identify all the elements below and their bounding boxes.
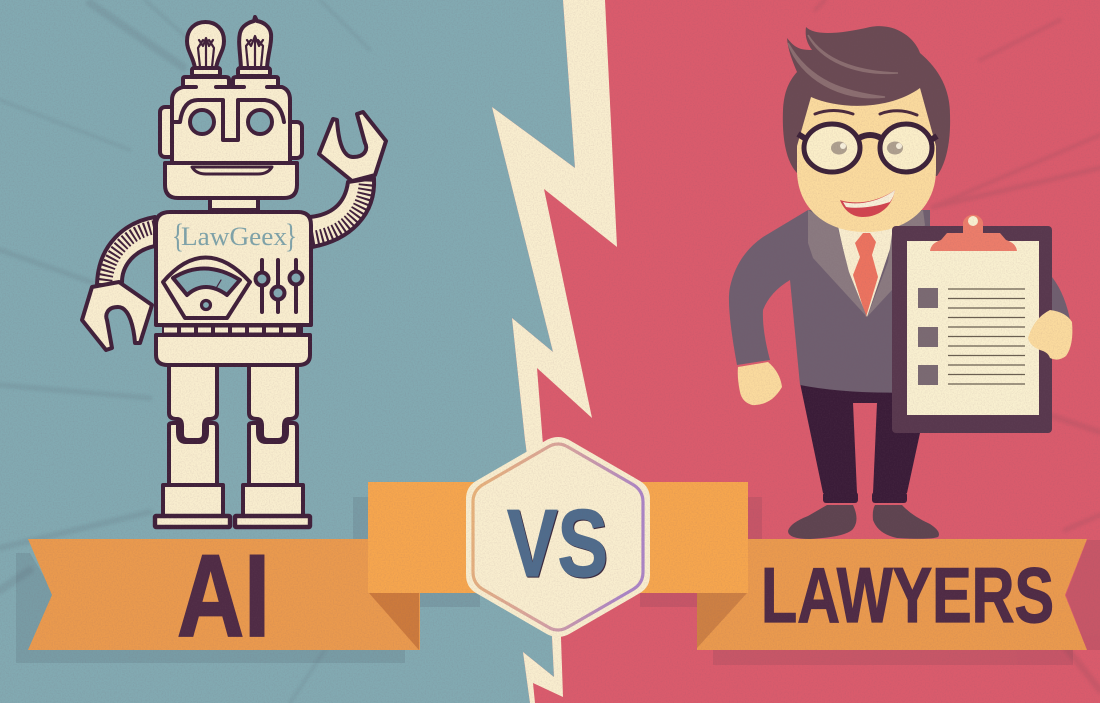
robot left arm	[97, 217, 155, 287]
ribbon: Lawyers	[697, 539, 1087, 650]
ribbon fold left	[369, 593, 419, 650]
ribbon drop shadows	[16, 497, 1100, 665]
left boot	[163, 485, 223, 516]
robot left leg	[155, 365, 230, 527]
checklist lines	[948, 289, 1025, 384]
robot neck	[210, 198, 258, 210]
lawyer trouser cuffs	[823, 492, 907, 503]
heading: AI: AI	[177, 530, 270, 661]
lawyer suit jacket	[729, 210, 930, 393]
lawyer pupils	[831, 142, 903, 154]
robot	[82, 17, 386, 527]
robot eyes	[190, 110, 272, 134]
VS text shadow: VS	[508, 491, 609, 598]
robot right bulb	[238, 17, 271, 76]
robot mouth	[192, 167, 272, 174]
gauge	[163, 258, 250, 318]
lawyer hair highlights	[788, 35, 898, 98]
robot left wrench	[82, 282, 152, 350]
ribbon fold right	[697, 593, 747, 648]
lawyer right hand	[1028, 310, 1072, 360]
robot right arm	[310, 178, 374, 247]
lawyer lapels	[808, 210, 925, 317]
lawyer face	[797, 88, 936, 232]
clipboard	[892, 215, 1052, 433]
lawyer tie	[853, 233, 878, 317]
lawyer	[729, 26, 1072, 539]
lawyer glasses	[798, 124, 937, 172]
brand text: LawGeex: }	[285, 218, 297, 255]
ribbon: AI	[28, 539, 420, 650]
lawyer eyebrows	[815, 110, 917, 115]
clipboard clip	[930, 215, 1017, 251]
central banner	[368, 482, 748, 593]
background: teal side	[0, 0, 575, 703]
robot jaw	[165, 163, 297, 198]
robot right wrench	[319, 112, 386, 181]
robot belt	[162, 325, 303, 335]
lawyer trousers	[800, 383, 925, 493]
brand text: LawGeex: LawGeex	[181, 222, 287, 251]
brand text: LawGeex	[172, 218, 297, 255]
lawyer hair back	[783, 26, 950, 176]
checklist boxes	[918, 288, 938, 385]
robot ears	[160, 107, 178, 157]
robot right leg	[235, 365, 310, 527]
hexagon ring	[473, 444, 643, 630]
robot torso	[156, 212, 311, 325]
sliders	[256, 260, 302, 312]
lawyer shoes	[788, 505, 939, 539]
clipboard paper	[907, 241, 1039, 415]
right boot	[243, 485, 303, 516]
lawyer left fist	[738, 362, 782, 405]
VS hexagon badge	[466, 437, 650, 637]
lawyer right sleeve	[1040, 240, 1071, 340]
robot left bulb	[187, 22, 224, 76]
lawyer mouth	[840, 190, 895, 217]
VS text: VS	[507, 490, 608, 597]
lawyer shirt	[837, 222, 895, 317]
robot head	[172, 77, 290, 163]
brand text: LawGeex: {	[172, 218, 184, 255]
robot pelvis	[156, 335, 310, 365]
lightning bolt	[492, 0, 617, 703]
